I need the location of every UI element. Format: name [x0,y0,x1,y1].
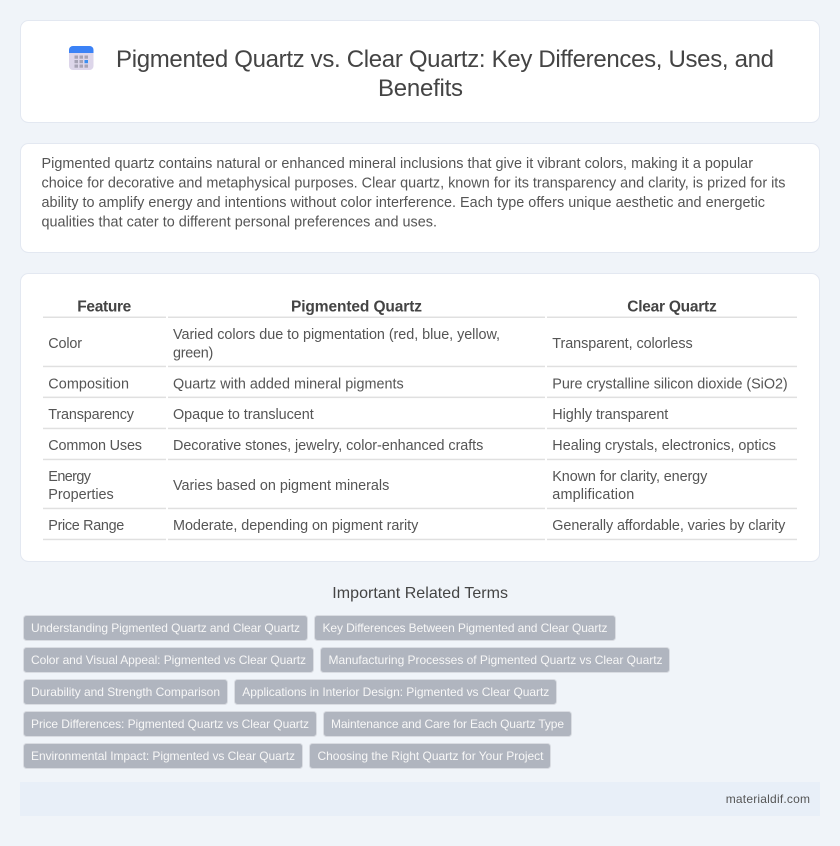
panel: introduction [20,144,820,252]
footer [20,782,820,816]
row: price range [48,518,786,534]
tag [310,744,550,768]
row: color [48,327,693,361]
row: composition [48,376,788,392]
title [116,46,774,102]
row: common uses: Decorative stones, jewelry, color-enhanced crafts [173,438,483,454]
intro text block: choice for decorative and metaphysical purposes. Clear quartz, known for its transparency and clarity, is prized for its [42,176,786,192]
row: energy properties: Properties [48,487,114,503]
row: common uses: Common Uses [48,438,142,454]
tag: Manufacturing Processes of Pigmented Quartz vs Clear Quartz [328,653,662,667]
tag [24,744,302,768]
tag [24,680,228,704]
related terms tags [24,616,670,768]
row: composition: Pure crystalline silicon dioxide (SiO2) [552,376,788,392]
tag: Environmental Impact: Pigmented vs Clear Quartz [31,749,295,763]
table header row: Pigmented Quartz [291,298,422,316]
row: energy properties: Known for clarity, energy [552,469,708,485]
tag: Key Differences Between Pigmented and Clear Quartz [322,621,608,635]
tag [24,648,314,672]
footer: materialdif.com [726,792,810,806]
row: transparency: Opaque to translucent [173,407,314,423]
row: price range: Moderate, depending on pigment rarity [173,518,419,534]
tag: Maintenance and Care for Each Quartz Type [331,717,564,731]
row: composition: Quartz with added mineral pigments [173,376,404,392]
row: energy properties [48,469,708,503]
tag [320,648,670,672]
row: transparency: Highly transparent [552,407,668,423]
row: transparency [48,407,668,423]
intro text block [42,156,786,230]
intro text block: Pigmented quartz contains natural or enhanced mineral inclusions that give it vibrant colors, making it a popular [42,156,753,172]
title: Benefits [378,75,463,102]
tag [324,712,572,736]
panel: header [20,20,820,122]
table header row: Feature [77,298,132,316]
row: energy properties: amplification [552,487,634,503]
row: common uses [48,438,776,454]
title: Pigmented Quartz vs. Clear Quartz: Key Differences, Uses, and [116,46,774,73]
tag: Choosing the Right Quartz for Your Project [318,749,544,763]
icon: calendar grid [69,46,94,70]
tag: Price Differences: Pigmented Quartz vs Clear Quartz [31,717,309,731]
tag [314,616,616,640]
tag: Understanding Pigmented Quartz and Clear Quartz [31,621,300,635]
table header row: Clear Quartz [627,298,717,316]
row: energy properties: Varies based on pigment minerals [173,478,389,494]
row: price range: Generally affordable, varies by clarity [552,518,786,534]
tag: Applications in Interior Design: Pigmented vs Clear Quartz [242,685,549,699]
tag [24,712,316,736]
intro text block: ability to amplify energy and intentions without color interference. Each type offers unique aesthetic and energetic [42,195,765,211]
row: color: Transparent, colorless [552,336,693,352]
intro text block: qualities that cater to different personal preferences and uses. [42,214,437,230]
row: price range: Price Range [48,518,124,534]
table header row [77,298,717,316]
row: energy properties: Energy [48,469,92,485]
row: transparency: Transparency [48,407,135,423]
row: common uses: Healing crystals, electronics, optics [552,438,776,454]
tag: Durability and Strength Comparison [31,685,220,699]
row: color: Color [48,336,82,352]
related terms heading: Important Related Terms [332,585,508,602]
panel: comparison table [20,274,820,562]
tag [234,680,556,704]
row: color: Varied colors due to pigmentation (red, blue, yellow, [173,327,500,343]
row: color: green) [173,345,213,361]
tag: Color and Visual Appeal: Pigmented vs Clear Quartz [31,653,306,667]
row: composition: Composition [48,376,129,392]
tag [24,616,308,640]
